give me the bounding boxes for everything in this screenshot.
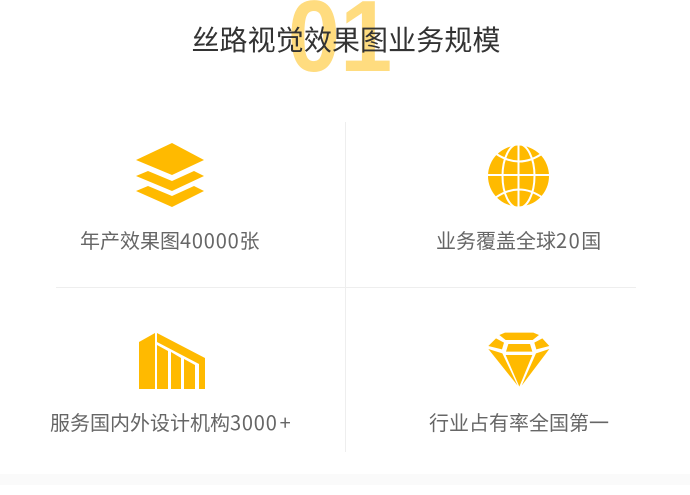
horizontal divider bbox=[56, 287, 636, 288]
icon: globe bbox=[488, 146, 549, 206]
icon: diamond bbox=[488, 332, 550, 386]
label: annual output: 年产效果图40000张 bbox=[80, 225, 260, 254]
label: institutions served: 服务国内外设计机构3000+ bbox=[50, 407, 291, 436]
label: market share: 行业占有率全国第一 bbox=[429, 407, 609, 436]
label: global coverage: 业务覆盖全球20国 bbox=[436, 225, 601, 254]
vertical divider bbox=[345, 122, 346, 452]
title: 丝路视觉效果图业务规模 bbox=[191, 19, 501, 59]
icon: layers bbox=[136, 143, 204, 207]
footer band bbox=[0, 474, 690, 485]
icon: building bbox=[139, 333, 205, 389]
